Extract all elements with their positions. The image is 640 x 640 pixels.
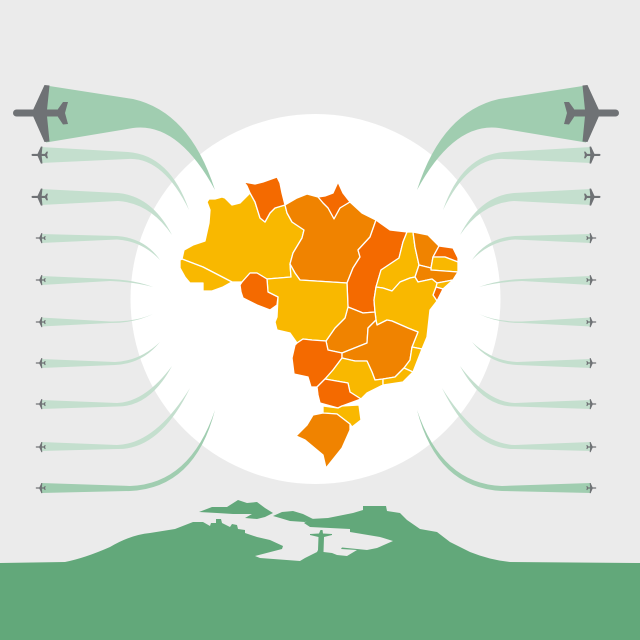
state: Mato Grosso bbox=[267, 264, 348, 343]
state: Amazonas bbox=[182, 193, 304, 282]
state: Para bbox=[285, 194, 376, 283]
Rio de Janeiro skyline with Christ statue bbox=[0, 500, 640, 640]
island middle bbox=[273, 511, 313, 522]
state: Parana bbox=[317, 379, 361, 408]
white sun circle bbox=[130, 114, 500, 484]
map of Brazil bbox=[180, 177, 458, 468]
ground and main hills bbox=[0, 506, 640, 640]
state: Goias bbox=[326, 307, 376, 353]
state: Santa Catarina bbox=[323, 405, 361, 427]
state: Sergipe bbox=[433, 287, 443, 301]
plane with trail, row 6 bbox=[36, 314, 153, 327]
state: Maranhao bbox=[376, 232, 419, 291]
plane with trail, row 3 bbox=[32, 188, 172, 235]
state: Alagoas bbox=[436, 280, 453, 289]
island top left bbox=[199, 500, 273, 519]
state: Roraima bbox=[244, 177, 285, 222]
plane with trail, row 10 bbox=[36, 410, 215, 493]
state: Pernambuco bbox=[415, 265, 458, 283]
state: Ceara bbox=[413, 232, 439, 268]
state: Amapa bbox=[318, 182, 350, 219]
state: Paraiba bbox=[431, 257, 458, 272]
flight trails and planes: right bbox=[417, 85, 619, 493]
state: Bahia bbox=[374, 277, 437, 349]
plane with trail, row 9 bbox=[36, 388, 190, 452]
state: Rio Grande do Norte bbox=[433, 246, 458, 262]
plane with trail, row 7 bbox=[36, 342, 160, 368]
plane with trail, row 4 bbox=[36, 233, 160, 260]
plane with trail, row 5 bbox=[36, 275, 153, 287]
state: Mato Grosso do Sul bbox=[292, 339, 342, 387]
plane with trail, row 2 bbox=[32, 146, 189, 210]
state: Sao Paulo bbox=[325, 358, 383, 399]
state: Rio de Janeiro bbox=[383, 368, 413, 385]
state: Rondonia bbox=[240, 273, 278, 310]
state: Rio Grande do Sul bbox=[296, 413, 350, 468]
flight trails and planes: left bbox=[13, 85, 215, 493]
state: Minas Gerais bbox=[342, 320, 418, 380]
state: Tocantins bbox=[347, 220, 407, 313]
state: Acre bbox=[180, 259, 232, 291]
big plane with trail bbox=[13, 85, 215, 190]
state: Espirito Santo bbox=[404, 347, 422, 372]
plane with trail, row 8 bbox=[36, 366, 172, 409]
